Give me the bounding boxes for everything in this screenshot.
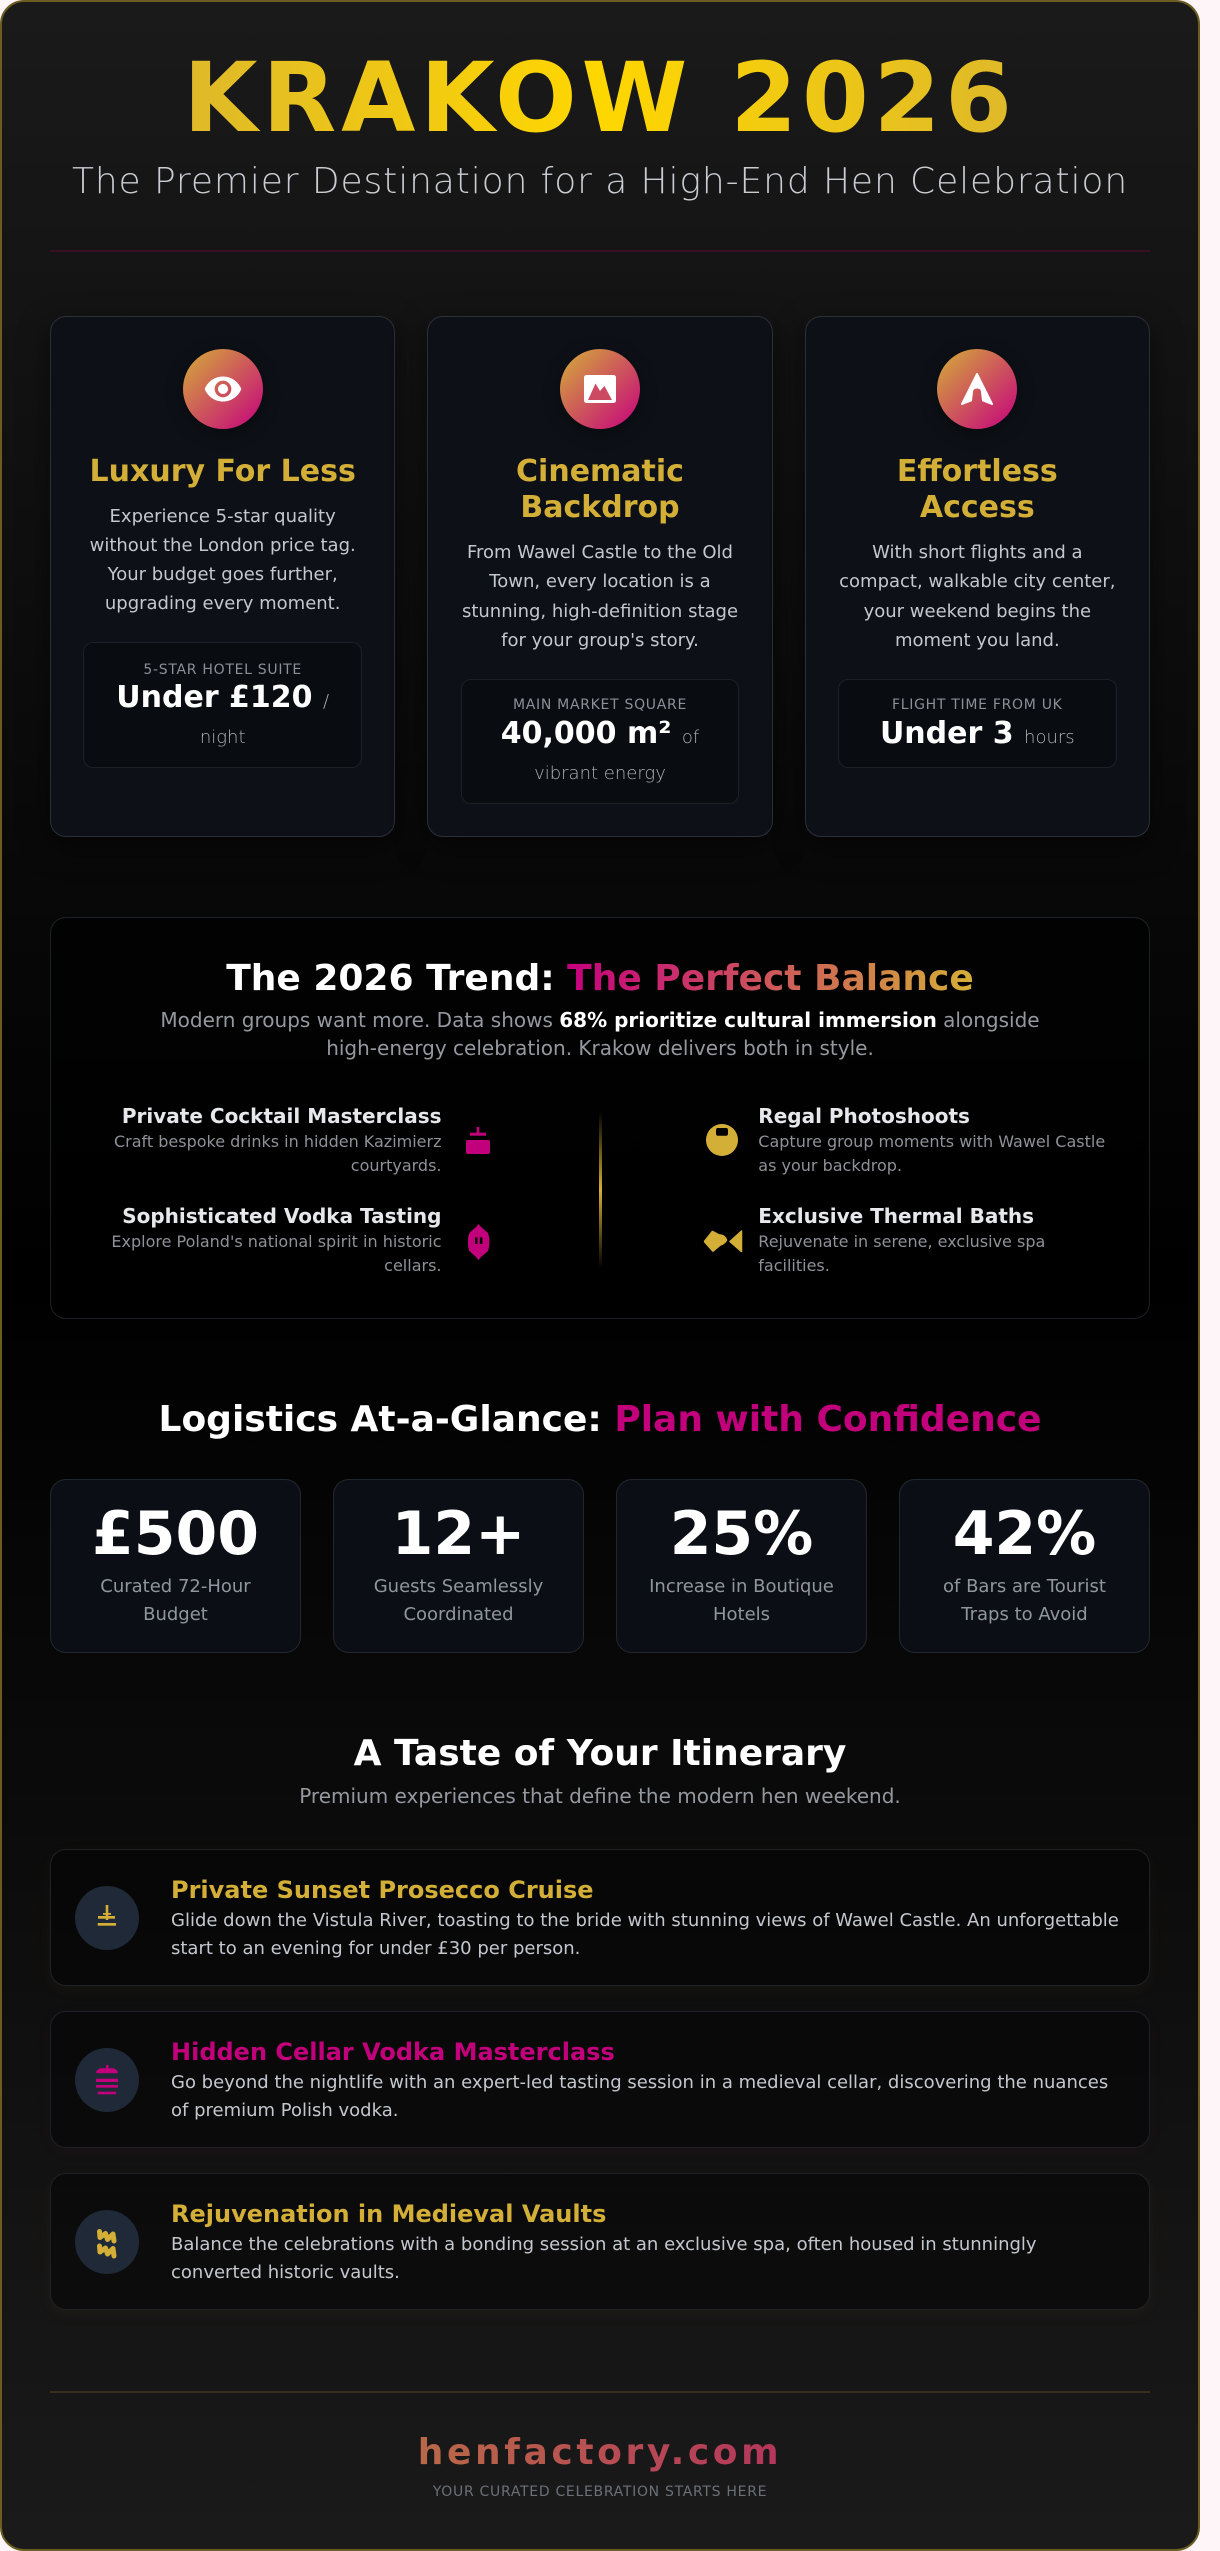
description	[171, 2072, 1108, 2121]
title: Hidden Cellar Vodka Masterclass	[171, 2038, 615, 2066]
item: regal photoshoots: Regal Photoshoots	[758, 1104, 970, 1128]
description: Balance the celebrations with a bonding session at an exclusive spa, often housed in stunningly	[171, 2234, 1037, 2255]
title: KRAKOW 2026	[183, 42, 1017, 154]
item: vodka tasting: cellars.	[384, 1256, 442, 1275]
heading	[897, 454, 1058, 524]
icon: picture	[560, 349, 640, 429]
heading: Backdrop	[520, 490, 680, 524]
heading: Luxury For Less	[90, 454, 356, 488]
caption: Curated 72-Hour	[100, 1576, 251, 1596]
description: for your group's story.	[501, 630, 699, 651]
icon: camera	[706, 1124, 738, 1156]
icon: cocktail kit	[466, 1127, 490, 1154]
item: private cocktail masterclass: Craft bespoke drinks in hidden Kazimierz	[114, 1132, 442, 1151]
value: 25%	[670, 1499, 813, 1569]
description: Glide down the Vistula River, toasting to the bride with stunning views of Wawel Castle. An unforgettable	[171, 1910, 1119, 1931]
stat card: budget	[50, 1479, 301, 1653]
caption	[943, 1576, 1106, 1624]
itinerary heading: A Taste of Your Itinerary	[354, 1732, 846, 1774]
item: thermal baths: Rejuvenate in serene, exclusive spa	[758, 1232, 1045, 1251]
description: of premium Polish vodka.	[171, 2100, 398, 2121]
description: From Wawel Castle to the Old	[467, 542, 733, 563]
caption: Traps to Avoid	[961, 1604, 1088, 1624]
item: thermal baths	[758, 1204, 1045, 1275]
stat value	[116, 680, 329, 748]
value: 42%	[953, 1499, 1096, 1569]
card background	[427, 316, 773, 836]
heading	[516, 454, 684, 524]
panel: cinematic backdrop	[427, 316, 773, 837]
subtitle: The Premier Destination for a High-End Hen Celebration	[72, 160, 1128, 202]
description: Town, every location is a	[489, 571, 711, 592]
value: 12+	[392, 1499, 525, 1569]
description: your weekend begins the	[864, 601, 1091, 622]
description	[839, 542, 1116, 651]
stat value: 40,000 m² of	[501, 716, 699, 751]
logistics heading: Logistics At-a-Glance: Plan with Confidence	[158, 1399, 1042, 1440]
title	[50, 50, 1150, 146]
card background	[805, 316, 1150, 836]
trend intro text: Modern groups want more. Data shows 68% prioritize cultural immersion alongside	[160, 1008, 1040, 1032]
icon: eye	[183, 349, 263, 429]
icon: navigation arrow	[937, 349, 1017, 429]
description: upgrading every moment.	[105, 593, 340, 614]
stat label: FLIGHT TIME FROM UK	[892, 697, 1063, 713]
description: With short flights and a	[872, 542, 1083, 563]
item: regal photoshoots: Capture group moments with Wawel Castle	[758, 1132, 1105, 1151]
panel: effortless access	[805, 316, 1150, 837]
caption	[649, 1576, 834, 1624]
stat card: tourist traps	[899, 1479, 1150, 1653]
description: without the London price tag.	[90, 535, 356, 556]
panel: luxury for less	[50, 316, 395, 837]
itinerary subheading: Premium experiences that define the modern hen weekend.	[299, 1784, 901, 1808]
item: regal photoshoots	[758, 1104, 1105, 1175]
caption: Hotels	[713, 1604, 770, 1624]
description	[90, 506, 356, 614]
description: start to an evening for under £30 per person.	[171, 1938, 580, 1959]
footer brand: henfactory.com	[418, 2432, 782, 2472]
stat value	[501, 716, 700, 784]
panel: the 2026 trend	[50, 917, 1150, 1318]
card background	[50, 316, 395, 836]
icon circle: cellar	[75, 2048, 139, 2112]
item: private cocktail masterclass	[114, 1104, 442, 1175]
caption: of Bars are Tourist	[943, 1576, 1106, 1596]
value: £500	[92, 1499, 259, 1569]
icon circle: waves	[75, 2210, 139, 2274]
description: stunning, high-definition stage	[462, 601, 738, 622]
stat label: MAIN MARKET SQUARE	[513, 697, 687, 713]
stat box	[838, 678, 1117, 768]
description	[462, 542, 738, 651]
caption	[100, 1576, 251, 1624]
stat card: boutique hotels	[616, 1479, 867, 1653]
stat value: Under £120 /	[116, 680, 329, 714]
stat label: 5-STAR HOTEL SUITE	[143, 662, 302, 678]
item: vodka tasting: Explore Poland's national spirit in historic	[111, 1232, 442, 1251]
trend intro text	[160, 1008, 1040, 1060]
item: private cocktail masterclass: Private Cocktail Masterclass	[122, 1104, 442, 1128]
icon circle: boat	[75, 1886, 139, 1950]
caption: Guests Seamlessly	[374, 1576, 543, 1596]
itinerary item: prosecco cruise	[50, 1849, 1150, 1986]
description	[171, 1910, 1119, 1959]
centre divider line	[598, 1112, 602, 1268]
description: Your budget goes further,	[108, 564, 338, 585]
description: Go beyond the nightlife with an expert-led tasting session in a medieval cellar, discovering the nuances	[171, 2072, 1108, 2093]
stat card: guests	[333, 1479, 584, 1653]
itinerary item: vodka masterclass	[50, 2011, 1150, 2148]
heading: Cinematic	[516, 454, 684, 488]
description	[171, 2234, 1037, 2283]
stat value: night	[200, 727, 246, 748]
trend heading: The 2026 Trend: The Perfect Balance	[226, 958, 974, 998]
description: compact, walkable city center,	[839, 571, 1116, 592]
caption: Coordinated	[403, 1604, 514, 1624]
caption: Budget	[143, 1604, 208, 1624]
item: vodka tasting	[111, 1204, 442, 1275]
caption: Increase in Boutique	[649, 1576, 834, 1596]
heading: Access	[920, 490, 1035, 524]
item: private cocktail masterclass: courtyards.	[351, 1156, 442, 1175]
footer brand	[50, 2430, 1150, 2474]
description: moment you land.	[895, 630, 1060, 651]
item: thermal baths: facilities.	[758, 1256, 830, 1275]
item: regal photoshoots: as your backdrop.	[758, 1156, 902, 1175]
item: vodka tasting: Sophisticated Vodka Tasting	[122, 1204, 442, 1228]
footer tagline: YOUR CURATED CELEBRATION STARTS HERE	[433, 2484, 767, 2500]
title: Private Sunset Prosecco Cruise	[171, 1876, 594, 1904]
item: thermal baths: Exclusive Thermal Baths	[758, 1204, 1034, 1228]
stat box	[83, 642, 362, 768]
icon: vodka bottle	[468, 1224, 490, 1260]
icon: spa	[704, 1230, 742, 1252]
description: Experience 5-star quality	[110, 506, 336, 527]
caption	[374, 1576, 543, 1624]
trend intro text: high-energy celebration. Krakow delivers both in style.	[326, 1036, 874, 1060]
stat value: Under 3 hours	[880, 716, 1075, 751]
title: Rejuvenation in Medieval Vaults	[171, 2200, 606, 2228]
stat value: vibrant energy	[534, 763, 666, 784]
heading: Effortless	[897, 454, 1058, 488]
description: converted historic vaults.	[171, 2262, 400, 2283]
itinerary item: medieval vaults	[50, 2173, 1150, 2310]
stat box	[461, 678, 739, 804]
